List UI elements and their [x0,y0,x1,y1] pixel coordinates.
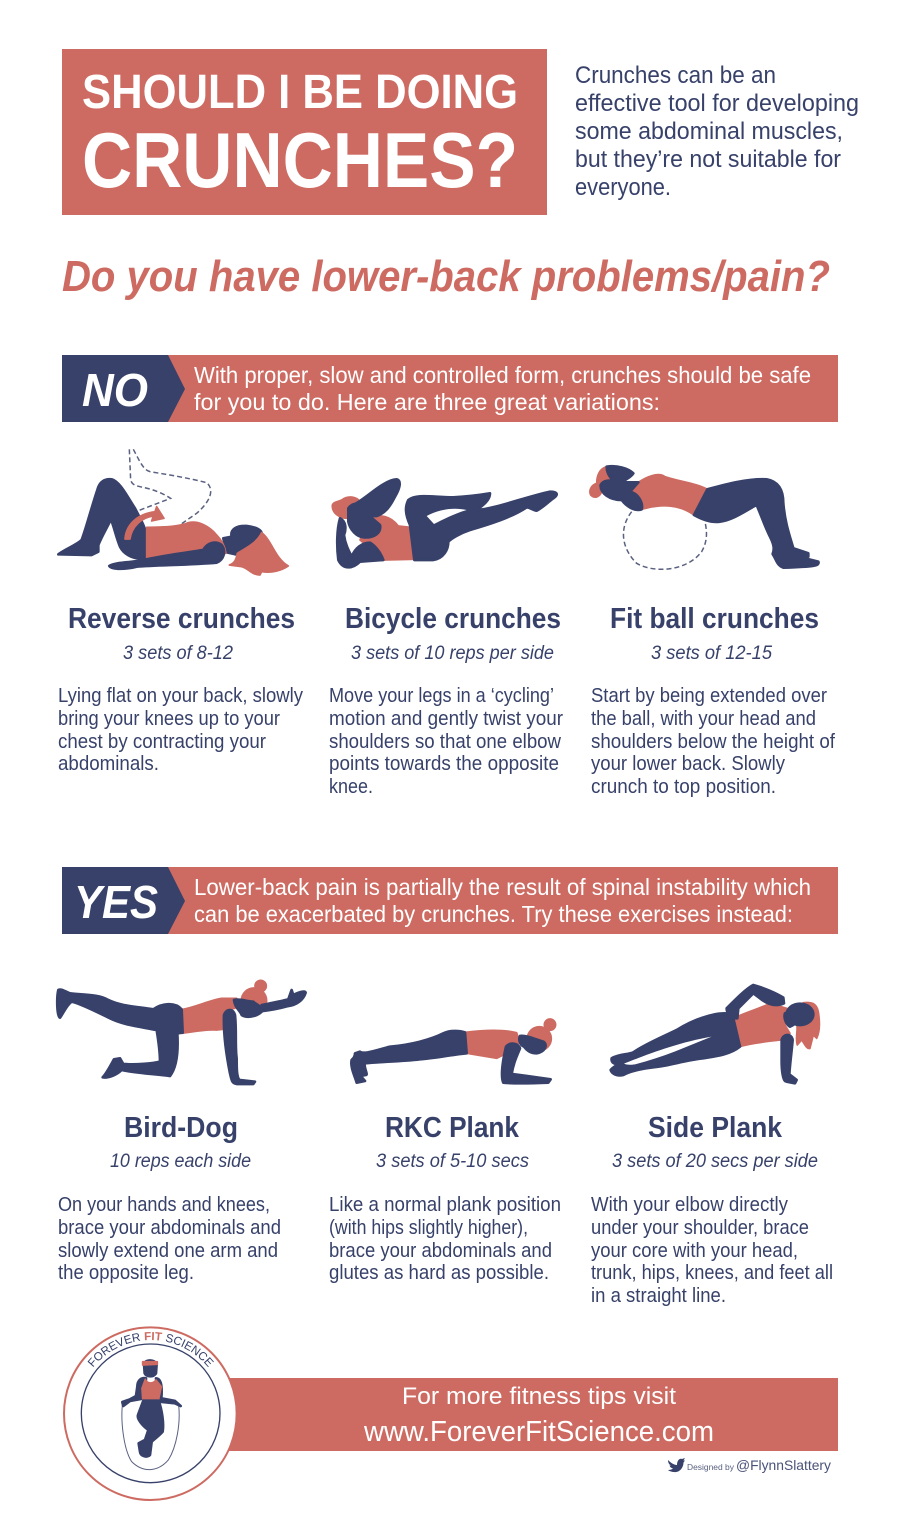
exercise: bird-dog [57,980,306,1284]
heading: Bicycle crunches [345,603,561,635]
footer bar [225,1378,838,1451]
footer bar: www.ForeverFitScience.com [363,1416,714,1448]
description [329,1194,561,1284]
description: Like a normal plank position [329,1194,561,1216]
logo skipping figure [122,1360,181,1470]
icon: side plank figure [611,985,819,1083]
exercise: bicycle crunches [329,479,563,798]
intro text: everyone. [575,174,671,201]
intro text: some abdominal muscles, [575,118,843,145]
description: the ball, with your head and [591,708,816,730]
intro text: Crunches can be an [575,62,776,89]
description [58,685,303,775]
description: your core with your head, [591,1240,798,1262]
description [591,685,835,798]
sets and reps: 3 sets of 5-10 secs [376,1150,529,1172]
heading: Fit ball crunches [610,603,819,635]
description: brace your abdominals and [58,1217,281,1239]
description: abdominals. [58,753,159,775]
sets and reps: 10 reps each side [110,1150,251,1172]
designer credit: @FlynnSlattery [736,1457,831,1473]
icon: twitter bird [668,1458,685,1472]
title panel: SHOULD I BE DOING [82,66,518,119]
exercise: rkc plank [329,1019,561,1284]
description: brace your abdominals and [329,1240,552,1262]
description: under your shoulder, brace [591,1217,809,1239]
sets and reps: 3 sets of 12-15 [651,642,772,664]
description: Lying flat on your back, slowly [58,685,303,707]
banner: no: With proper, slow and controlled form, crunches should be safe [194,362,811,388]
banner: yes: can be exacerbated by crunches. Try these exercises instead: [194,901,793,927]
heading: RKC Plank [385,1112,520,1144]
description: points towards the opposite [329,753,559,775]
exercise: side plank [591,985,833,1307]
icon: reverse crunch figure [58,449,288,575]
question heading: Do you have lower-back problems/pain? [62,252,830,301]
icon: fit ball crunch figure [590,466,819,569]
description: bring your knees up to your [58,708,280,730]
description: crunch to top position. [591,776,776,798]
icon: rkc plank figure [351,1019,556,1083]
description: trunk, hips, knees, and feet all [591,1262,833,1284]
footer bar: For more fitness tips visit [402,1383,676,1410]
logo wordmark: FOREVER FIT SCIENCE [88,1332,214,1368]
banner: yes: Lower-back pain is partially the result of spinal instability which [194,874,811,900]
title panel: CRUNCHES? [82,116,518,204]
description: knee. [329,776,373,798]
description: motion and gently twist your [329,708,563,730]
designer credit [668,1457,831,1473]
description: slowly extend one arm and [58,1240,278,1262]
description: glutes as hard as possible. [329,1262,549,1284]
description: the opposite leg. [58,1262,194,1284]
exercise: fit ball crunches [590,466,835,798]
description: shoulders below the height of [591,731,835,753]
banner: no: NO [82,364,148,416]
description: On your hands and knees, [58,1194,270,1216]
icon: bicycle crunch figure [332,479,557,567]
sets and reps: 3 sets of 20 secs per side [612,1150,818,1172]
sets and reps: 3 sets of 10 reps per side [351,642,554,664]
intro text [575,62,859,201]
heading: Bird-Dog [124,1112,238,1144]
description: chest by contracting your [58,731,266,753]
description: (with hips slightly higher), [329,1217,528,1239]
description: in a straight line. [591,1285,726,1307]
banner: no: for you to do. Here are three great variations: [194,389,660,415]
description: shoulders so that one elbow [329,731,562,753]
heading: Side Plank [648,1112,783,1144]
description [58,1194,281,1284]
intro text: but they’re not suitable for [575,146,841,173]
heading: Reverse crunches [68,603,295,635]
description: Move your legs in a ‘cycling’ [329,685,554,707]
icon: bird-dog figure [57,980,306,1084]
exercise: reverse crunches [58,449,303,775]
description [591,1194,833,1307]
logo badge [63,1326,236,1501]
banner: no [62,355,838,422]
description: Start by being extended over [591,685,827,707]
banner: yes: YES [74,876,158,928]
sets and reps: 3 sets of 8-12 [123,642,233,664]
intro text: effective tool for developing [575,90,859,117]
description: With your elbow directly [591,1194,788,1216]
title panel [62,49,547,215]
description [329,685,563,798]
designer credit: Designed by [687,1462,735,1472]
description: your lower back. Slowly [591,753,785,775]
banner: yes [62,867,838,934]
